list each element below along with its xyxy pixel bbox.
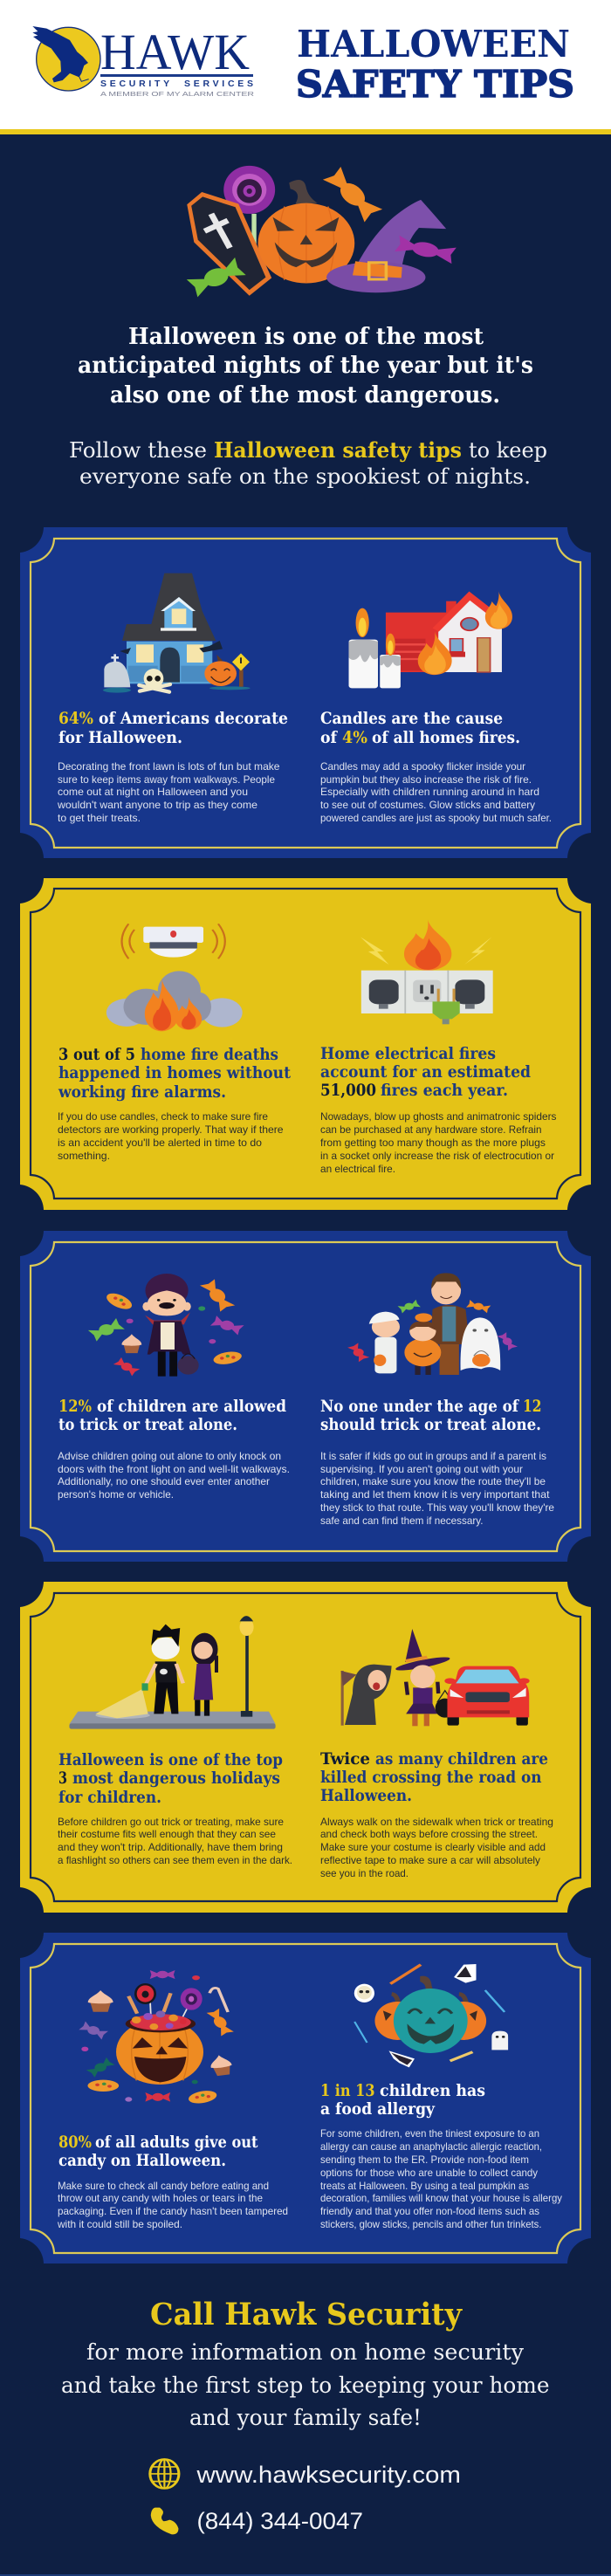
heading: 80% of adults: candy on Halloween. — [58, 2152, 226, 2170]
heading: 3 out of 5 deaths: working fire alarms. — [58, 1083, 226, 1102]
title: HALLOWEEN — [297, 23, 570, 65]
body text: costumes and flashlights: Before children go out trick or treating, make sure — [58, 1817, 284, 1828]
body text: groups and routes: supervising. If you aren't going out with your — [320, 1464, 523, 1475]
body text: decorating the lawn: wouldn't want anyone to trip as they come — [57, 800, 257, 811]
intro statement — [78, 324, 533, 409]
heading: candles cause 4% of fires: Candles are the cause — [320, 710, 503, 728]
body text: crossing the street: and check both ways before crossing the street. — [320, 1829, 538, 1840]
intro call to follow tips: to keep — [469, 437, 547, 463]
intro call to follow tips: Halloween safety tips — [214, 437, 462, 463]
body text: decorating the lawn: come out at night on Halloween and you — [58, 787, 248, 798]
illustration: overloaded electrical outlet — [360, 919, 493, 1024]
body text: groups and routes: It is safer if kids go out in groups and if a parent is — [320, 1451, 546, 1462]
body text: checking candy: Make sure to check all candy before eating and — [58, 2181, 269, 2192]
call to action text — [61, 2339, 550, 2431]
icon: green candy — [187, 258, 246, 297]
body text: candles: to see out of costumes. Glow sticks and battery — [320, 800, 535, 811]
body text: costumes and flashlights: their costume fits well enough that they can see — [58, 1829, 276, 1840]
logo: Hawk Security Services — [32, 24, 255, 98]
heading: 1 in 13 food allergy: children has — [380, 2082, 485, 2100]
heading: 12% of children: to trick or treat alone. — [58, 1416, 237, 1434]
body text: decorating the lawn: sure to keep items away from walkways. People — [58, 774, 275, 786]
body text: allergy friendly: decoration, families will know that your house is allergy — [320, 2193, 562, 2204]
heading: under the age of 12: No one under the age of — [320, 1398, 519, 1416]
heading: 12% of children: 12% — [58, 1398, 92, 1416]
icon: coffin — [187, 192, 271, 296]
body text: plugs: Nowadays, blow up ghosts and animatronic spiders — [320, 1111, 557, 1123]
body text: costumes and flashlights: and they won't trip. Additionally, have them bring — [58, 1842, 283, 1853]
call to action heading: Call Hawk Security — [150, 2297, 463, 2332]
icon: orange candy — [323, 167, 382, 223]
body text: candles: Candles may add a spooky flicker inside your — [320, 761, 525, 773]
body text: plugs: can be purchased at any hardware store. Refrain — [320, 1124, 541, 1136]
body text: candles — [320, 761, 552, 824]
logo wordmark: HAWK — [100, 24, 250, 80]
panel 2: fire alarms and electrical fires — [20, 878, 591, 1210]
icon: globe — [150, 2459, 179, 2489]
heading: candles cause 4% of fires: of all homes fires. — [372, 729, 520, 747]
body text: fire detectors: If you do use candles, check to make sure fire — [58, 1111, 268, 1123]
body text: allergy friendly: treats at Halloween. By using a teal pumpkin as — [320, 2181, 529, 2192]
body text: costumes and flashlights — [58, 1817, 292, 1866]
illustration: children with flashlight on sidewalk — [69, 1616, 276, 1729]
body text: plugs — [320, 1111, 557, 1175]
heading: electrical fires — [320, 1045, 531, 1100]
icon: purple candy — [395, 236, 457, 264]
heading: 1 in 13 food allergy — [320, 2082, 485, 2119]
intro statement: Halloween is one of the most — [128, 324, 484, 350]
body text: allergy friendly — [320, 2128, 562, 2230]
heading: 3 out of 5 deaths: happened in homes without — [58, 1064, 291, 1082]
heading: 64% decorate — [58, 710, 288, 747]
body text: allergy friendly: For some children, even the tiniest exposure to an — [320, 2128, 539, 2140]
heading: 12% of children: of children are allowed — [97, 1398, 286, 1416]
body text: fire detectors — [58, 1111, 283, 1162]
body text: decorating the lawn: to get their treats. — [58, 813, 141, 824]
call to action text: and take the first step to keeping your home — [61, 2373, 550, 2399]
body text: candles: powered candles are just as spooky but much safer. — [320, 813, 552, 824]
title — [296, 23, 574, 106]
heading: electrical fires: account for an estimated — [320, 1063, 531, 1082]
illustration: smoke detector above fire — [106, 924, 243, 1031]
title: SAFETY TIPS — [296, 63, 574, 106]
body text: decorating the lawn — [57, 761, 279, 824]
body text: allergy friendly: friendly and that you offer non-food items such as — [320, 2206, 539, 2217]
illustration: pumpkin full of candy — [79, 1970, 234, 2105]
body text: fire detectors: detectors are working properly. That way if there — [58, 1124, 283, 1136]
body text: candles: Especially with children running around in hard — [320, 787, 539, 798]
heading: 64% decorate: for Halloween. — [58, 729, 182, 747]
body text: checking candy: packaging. Even if the candy hasn't been tampered — [58, 2206, 288, 2217]
illustration: vampire child with candy — [88, 1274, 244, 1377]
icon: lollipop — [223, 166, 275, 244]
heading: 80% of adults: 80% — [58, 2133, 92, 2152]
heading: twice as many children: killed crossing the road on — [320, 1769, 542, 1787]
heading: twice as many children: Twice — [320, 1750, 370, 1769]
body text: checking candy: throw out any candy with holes or tears in the — [58, 2193, 263, 2204]
body text: allergy friendly: stickers, glow sticks, pencils and other fun trinkets. — [320, 2219, 541, 2230]
body text: plugs: an electrical fire. — [320, 1164, 395, 1175]
body text: fire detectors: something. — [58, 1151, 110, 1162]
heading: top 3 dangerous holidays: 3 — [58, 1769, 67, 1788]
illustration: decorated haunted house — [103, 574, 251, 693]
intro call to follow tips: Follow these — [69, 437, 207, 463]
body text: crossing the street — [320, 1817, 553, 1879]
illustration: candles and burning house — [349, 591, 512, 688]
body text: checking candy: with it could still be spoiled. — [57, 2219, 182, 2230]
body text: groups and routes: they stick to that route. This way you'll know they're — [320, 1502, 554, 1514]
heading: 64% decorate: of Americans decorate — [99, 710, 288, 728]
body text: knocking on doors — [58, 1451, 290, 1501]
body text: crossing the street: Always walk on the sidewalk when trick or treating — [320, 1817, 553, 1828]
heading: under the age of 12: 12 — [523, 1398, 541, 1416]
body text: allergy friendly: allergy can cause an anaphylactic allergic reaction, — [320, 2141, 542, 2153]
heading: candles cause 4% of fires — [320, 710, 520, 747]
body text: groups and routes — [320, 1451, 554, 1527]
logo tagline: SECURITY SERVICES — [100, 79, 253, 89]
call to action text: for more information on home security — [86, 2339, 525, 2366]
heading: 80% of adults: of all adults give out — [95, 2133, 258, 2152]
website: www.hawksecurity.com — [196, 2462, 461, 2488]
heading: 1 in 13 food allergy: a food allergy — [320, 2100, 436, 2119]
panel 4: visibility and road safety — [20, 1582, 591, 1913]
heading: twice as many children — [320, 1750, 548, 1805]
body text: knocking on doors: person's home or vehicle. — [58, 1489, 174, 1501]
heading: under the age of 12: should trick or treat alone. — [320, 1416, 541, 1434]
body text: crossing the street: Make sure your costume is clearly visible and add — [320, 1842, 546, 1853]
logo member line: A MEMBER OF MY ALARM CENTER — [100, 90, 255, 98]
body text: groups and routes: taking and let them know it is very important that — [320, 1489, 550, 1501]
body text: plugs: from getting too many though as the more plugs — [320, 1137, 546, 1149]
heading: top 3 dangerous holidays: for children. — [58, 1789, 161, 1807]
body text: crossing the street: reflective tape to make sure a car will absolutely — [320, 1855, 540, 1866]
body text: crossing the street: see you in the road. — [320, 1868, 408, 1879]
heading: electrical fires: fires each year. — [381, 1082, 508, 1100]
panel 1: decorations and candles — [20, 527, 591, 858]
heading: candles cause 4% of fires: 4% — [342, 729, 367, 747]
heading: candles cause 4% of fires: of — [320, 729, 338, 747]
body text: decorating the lawn: Decorating the front lawn is lots of fun but make — [58, 761, 279, 773]
body text: groups and routes: safe and can find them if necessary. — [320, 1515, 484, 1527]
heading: under the age of 12 — [320, 1398, 541, 1434]
heading: top 3 dangerous holidays: Halloween is one of the top — [58, 1751, 283, 1769]
icon: jack-o-lantern — [258, 180, 354, 284]
heading: 12% of children — [58, 1398, 286, 1434]
body text: allergy friendly: sending them to the ER. Provide non-food item — [320, 2154, 529, 2166]
body text: checking candy — [57, 2181, 288, 2230]
illustration: reaper, witch and car — [341, 1629, 530, 1726]
body text: knocking on doors: doors with the front light on and well-lit walkways. — [58, 1464, 290, 1475]
body text: candles: pumpkin but they also increase the risk of fire. — [320, 774, 532, 786]
heading: twice as many children: as many children are — [375, 1750, 548, 1769]
heading: 3 out of 5 deaths: home fire deaths — [141, 1046, 278, 1064]
body text: fire detectors: is an accident you'll be alerted in time to do — [58, 1137, 262, 1149]
heading: electrical fires: Home electrical fires — [320, 1045, 496, 1063]
icon: witch hat — [326, 200, 446, 292]
header band — [0, 0, 611, 134]
heading: top 3 dangerous holidays: most dangerous holidays — [72, 1769, 280, 1788]
panel 5: candy and allergies — [20, 1933, 591, 2263]
heading: twice as many children: Halloween. — [320, 1787, 412, 1805]
heading: electrical fires: 51,000 — [320, 1082, 376, 1100]
body text: allergy friendly: options for those who are unable to collect candy — [320, 2167, 538, 2179]
panel 3: trick or treating alone — [20, 1231, 591, 1562]
illustration: coffin, pumpkin, hat and candy — [187, 166, 457, 297]
heading: 3 out of 5 deaths: 3 out of 5 — [58, 1046, 135, 1064]
heading: 64% decorate: 64% — [58, 710, 93, 728]
intro call to follow tips: everyone safe on the spookiest of nights. — [79, 464, 531, 489]
body text: groups and routes: children, make sure you know the route they'll be — [320, 1476, 546, 1487]
intro call to follow tips — [69, 437, 547, 489]
heading: top 3 dangerous holidays — [58, 1751, 283, 1807]
body text: plugs: in a socket only increase the risk of electrocution or — [320, 1151, 554, 1162]
body text: knocking on doors: Additionally, no one should ever enter another — [58, 1476, 270, 1487]
icon: phone — [151, 2508, 178, 2534]
intro statement: also one of the most dangerous. — [110, 382, 500, 409]
phone number: (844) 344-0047 — [197, 2508, 363, 2534]
body text: knocking on doors: Advise children going out alone to only knock on — [58, 1451, 281, 1462]
body text: costumes and flashlights: a flashlight so others can see them even in the dark. — [58, 1855, 292, 1866]
illustration: teal pumpkin with stickers — [354, 1964, 508, 2067]
call to action text: and your family safe! — [189, 2405, 422, 2431]
icon: hawk on yellow oval — [32, 26, 100, 91]
heading: 3 out of 5 deaths — [58, 1046, 291, 1102]
heading: 1 in 13 food allergy: 1 in 13 — [320, 2082, 375, 2100]
intro statement: anticipated nights of the year but it's — [78, 353, 533, 379]
illustration: family in costumes — [347, 1273, 518, 1375]
heading: 80% of adults — [58, 2133, 258, 2170]
